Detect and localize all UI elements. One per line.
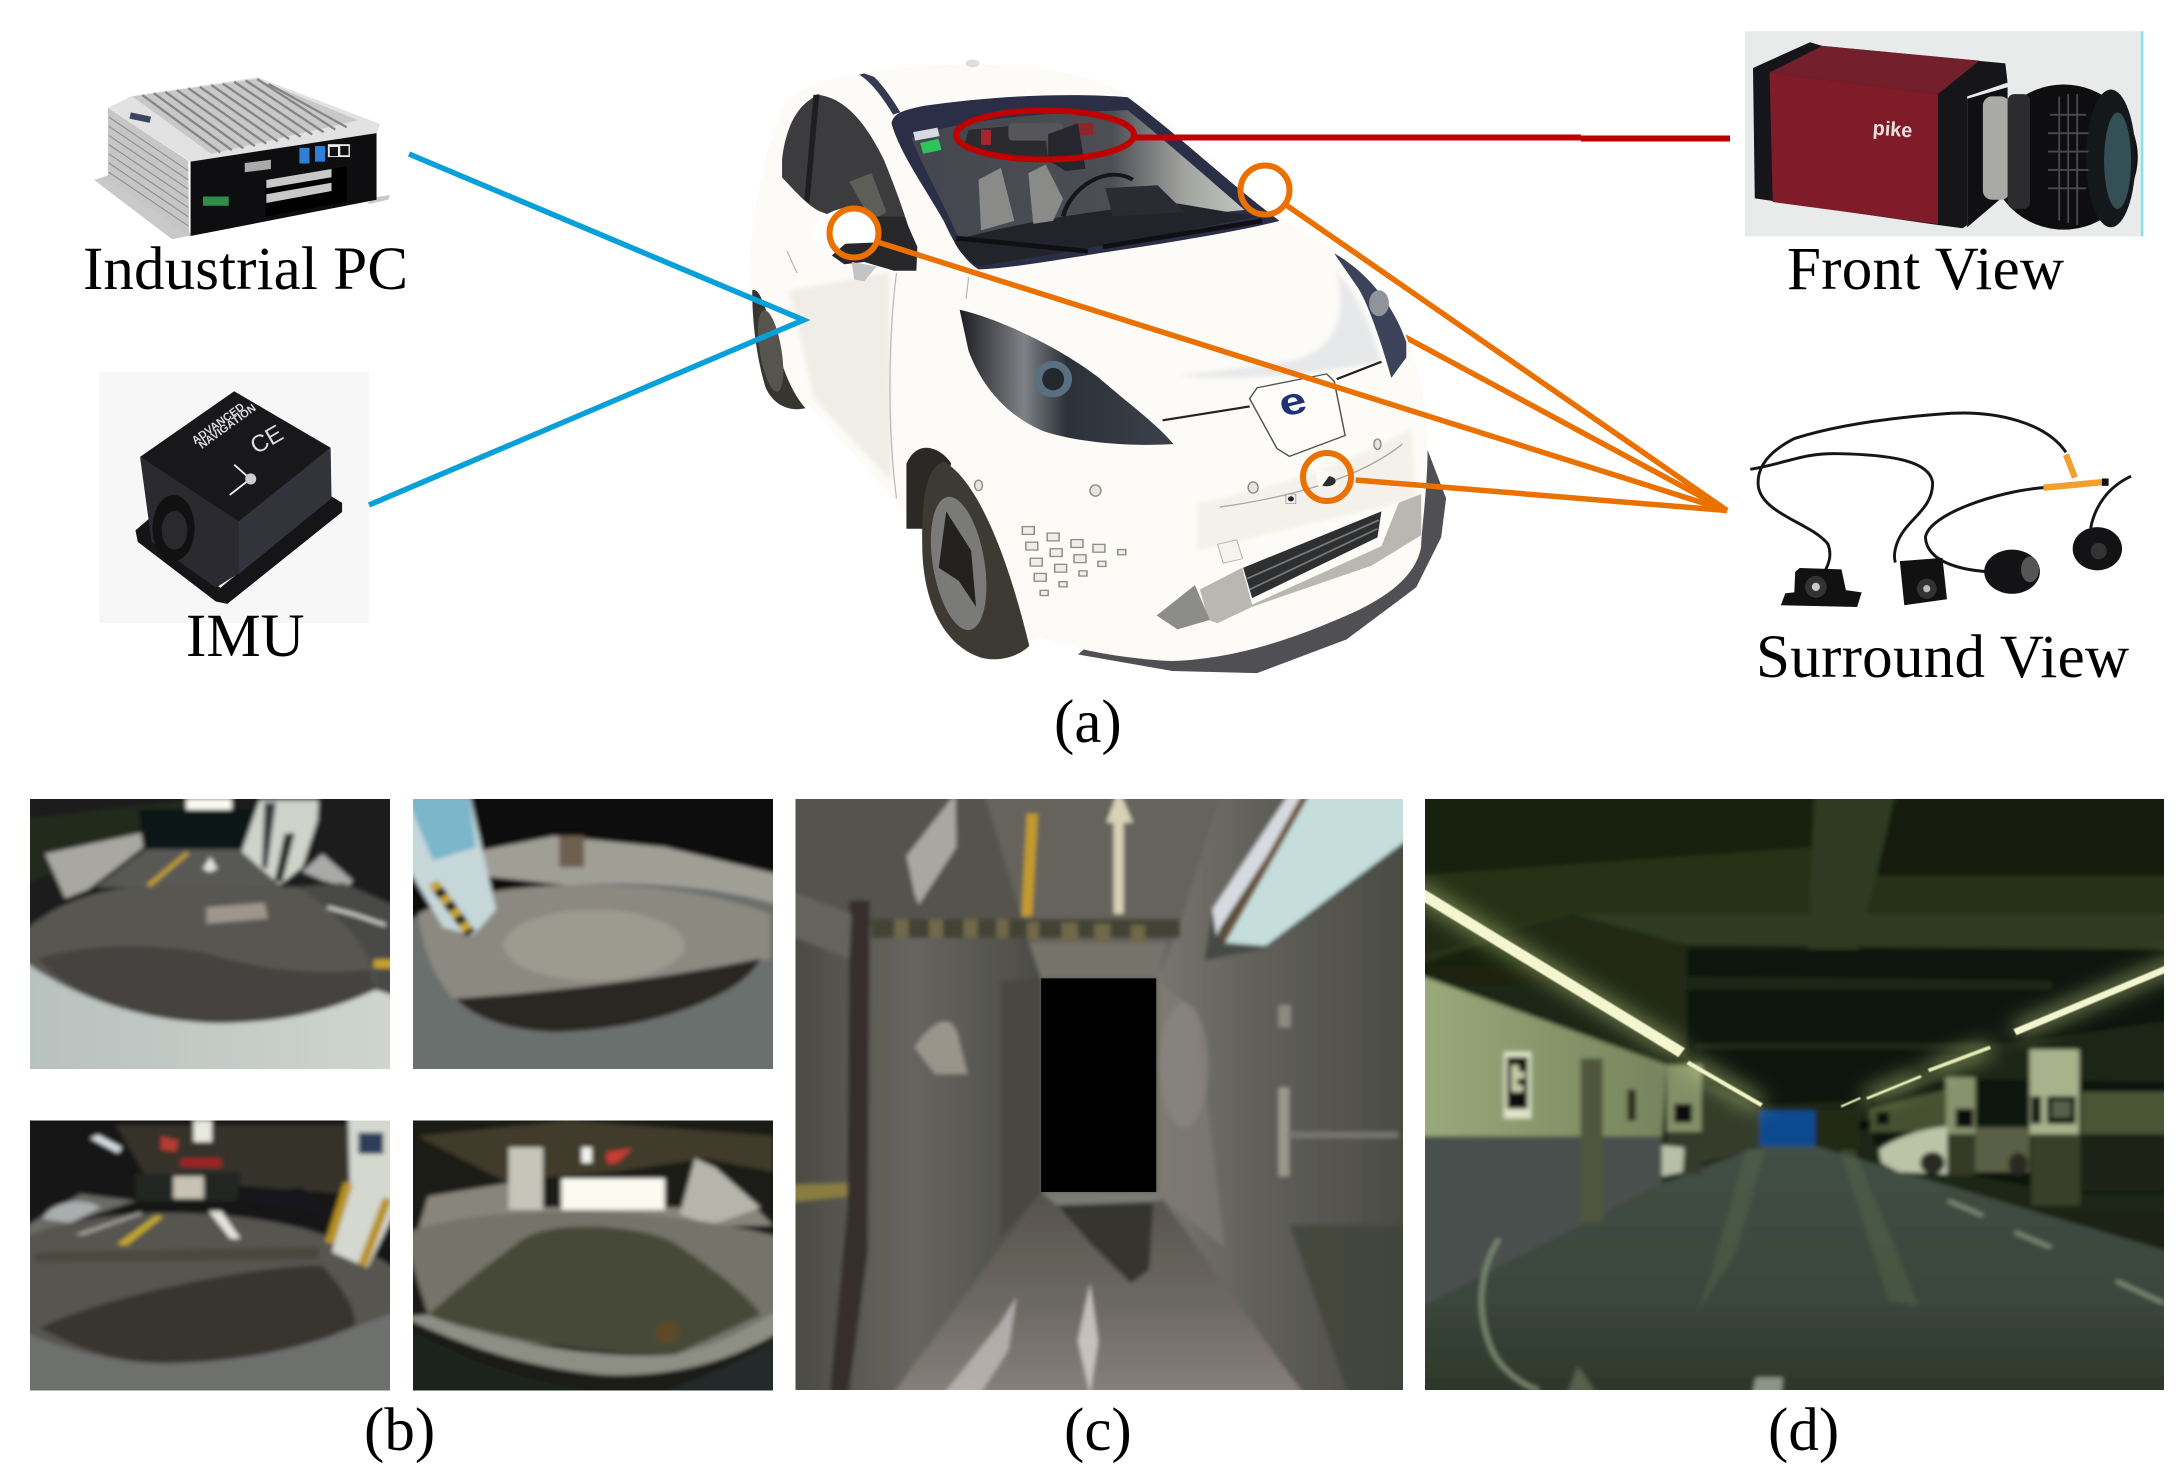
caption: (b): (b) — [364, 1397, 435, 1464]
windshield — [891, 95, 1279, 269]
arrow: blue connector from Industrial PC and IMU to car — [369, 154, 804, 505]
wheel arch and front wheel — [906, 448, 951, 529]
caption: (c): (c) — [1064, 1397, 1132, 1464]
icon: front view camera: pike — [1872, 117, 1913, 142]
grille and bumper — [1200, 494, 1421, 623]
panel: surround image right — [413, 799, 773, 1069]
label: Front View: Front View — [1787, 236, 2064, 303]
caption: (a): (a) — [1054, 689, 1122, 756]
icon: industrial PC — [94, 77, 390, 239]
rear wheel — [752, 290, 805, 409]
badge — [1250, 374, 1345, 456]
arrow: red callout from front camera — [956, 110, 1730, 160]
car — [749, 59, 1446, 673]
panel: surround image left — [413, 1120, 773, 1390]
caption: (d): (d) — [1768, 1397, 1839, 1464]
panel: front view image — [1425, 799, 2164, 1390]
arrow: orange line passing behind the car — [1405, 337, 1727, 510]
hood edge — [1163, 362, 1381, 420]
side windows — [782, 95, 915, 249]
left headlight — [960, 310, 1174, 445]
car: e — [1273, 379, 1312, 425]
label: Industrial PC: Industrial PC — [83, 236, 408, 303]
mirror — [832, 216, 917, 271]
icon: IMU: NAVIGATION — [197, 402, 258, 452]
label: IMU: IMU — [186, 603, 305, 670]
icon: IMU: CE — [246, 420, 288, 460]
right headlight — [1334, 253, 1406, 378]
arrow: orange callouts from surround cameras — [830, 166, 1727, 510]
panel: top-down stitched view — [796, 799, 1403, 1390]
label: Surround View: Surround View — [1756, 624, 2129, 691]
body lines — [787, 251, 969, 498]
icon: front view camera — [1745, 31, 2144, 236]
vents — [1022, 527, 1126, 596]
panel: surround image rear — [30, 1120, 390, 1390]
icon: IMU: ADVANCED — [190, 401, 247, 447]
panel: surround image front — [30, 799, 390, 1069]
icon: surround view cameras — [1750, 413, 2131, 607]
icon: IMU — [99, 372, 369, 623]
